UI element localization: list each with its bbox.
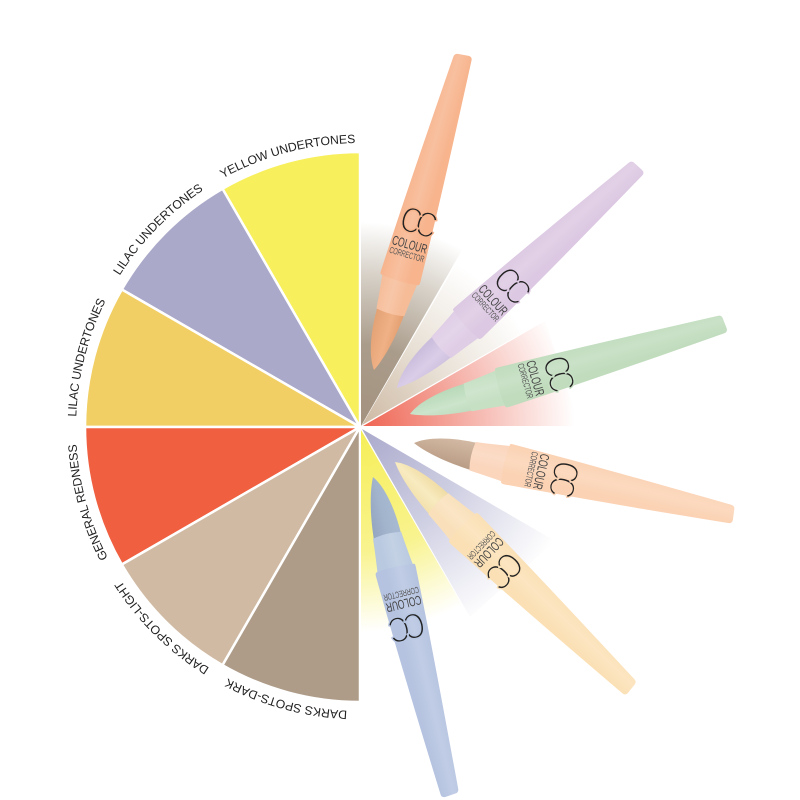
pen: gold corrector: COLOUR (471, 534, 507, 571)
pen: lilac corrector: CORRECTOR (470, 290, 502, 324)
label: yellow undertones: YELLOW UNDERTONES (219, 134, 355, 177)
ray: light tan (362, 240, 550, 425)
pen: green corrector: COLOUR (523, 359, 548, 397)
pen: lilac corrector: CC (485, 258, 540, 312)
wedge: dark spots light (122, 427, 360, 665)
pen: blue corrector (353, 472, 470, 800)
pen: orange corrector: CC (396, 197, 442, 246)
ray: lilac (362, 429, 555, 617)
wheel labels (68, 134, 355, 720)
pen: green corrector (404, 304, 731, 434)
wedge: yellow undertones (222, 152, 360, 427)
pen: gold corrector: CORRECTOR (465, 529, 498, 562)
wedge: gold undertones (85, 290, 360, 427)
pen: peach corrector: CC (541, 457, 588, 501)
pen: gold corrector (381, 447, 646, 704)
label: general redness: GENERAL REDNESS (68, 444, 106, 560)
pen: orange corrector (354, 49, 484, 376)
pen: lilac corrector (383, 151, 653, 403)
ray: dark tan (361, 215, 466, 426)
label: lilac undertones upper: LILAC UNDERTONES (113, 184, 202, 275)
pen: peach corrector: COLOUR (530, 452, 553, 491)
pen: gold corrector: CC (478, 544, 532, 598)
pen: green corrector: CORRECTOR (516, 362, 535, 400)
pen: blue corrector: COLOUR (384, 592, 423, 615)
fading colour rays: right half (361, 215, 580, 635)
label: lilac undertones lower: LILAC UNDERTONES (68, 298, 104, 416)
pen: lilac corrector: COLOUR (476, 281, 511, 318)
pen: orange corrector: COLOUR (390, 232, 429, 257)
pen: blue corrector: CORRECTOR (382, 585, 420, 603)
label: darks spots dark: DARKS SPOTS-DARK (224, 678, 346, 720)
ray: yellow (361, 430, 465, 635)
wedge: dark spots dark (222, 427, 360, 702)
wedge: general redness (85, 427, 360, 564)
label: darks spots light: DARKS SPOTS-LIGHT (114, 583, 209, 674)
colour wheel: left half wedges (85, 152, 360, 702)
wedge: lilac undertones (122, 189, 360, 427)
pen: peach corrector: CORRECTOR (522, 451, 540, 488)
pen: peach corrector (409, 423, 738, 535)
pen: green corrector: CC (535, 351, 584, 397)
ray: red (363, 321, 580, 426)
pen: blue corrector: CC (385, 604, 429, 652)
pen: orange corrector: CORRECTOR (388, 245, 426, 264)
